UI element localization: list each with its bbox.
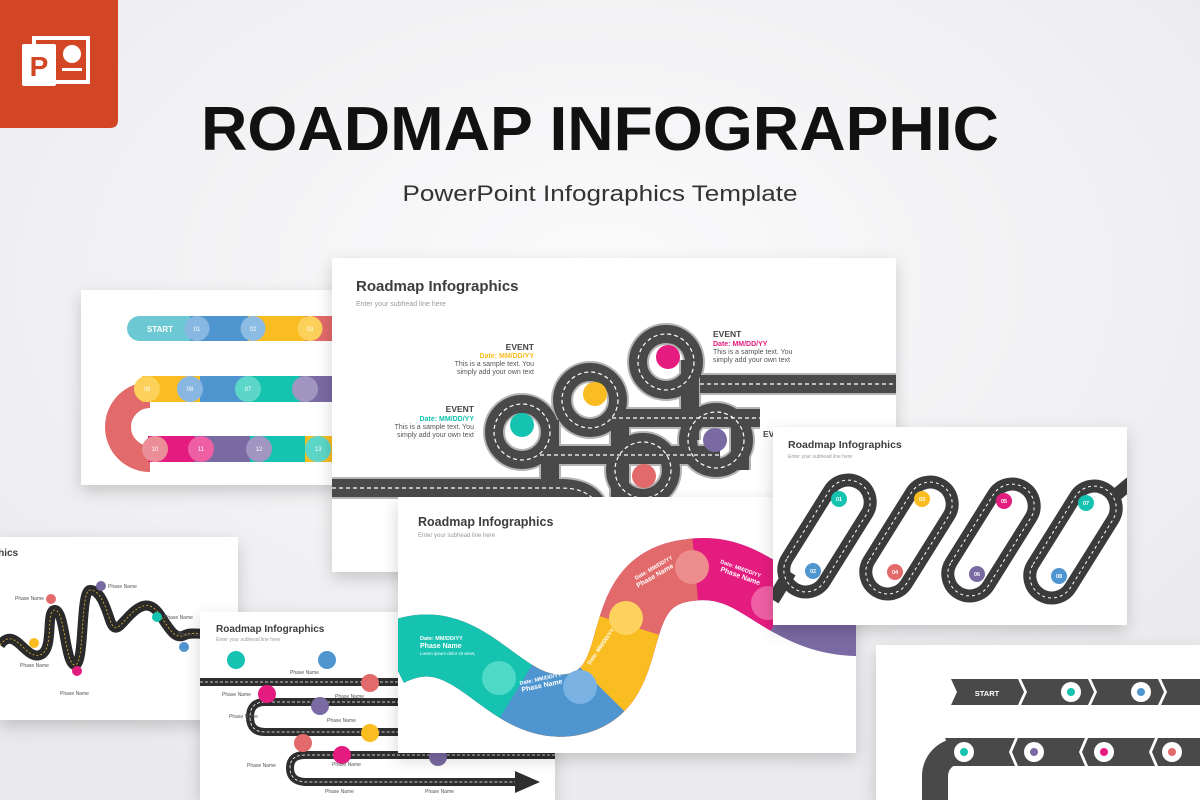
curve and rows: 11 [198, 447, 205, 453]
panel: straight roads with pins (bottom left): Phase Name [290, 670, 319, 676]
panel: straight roads with pins (bottom left): Phase Name [425, 789, 454, 795]
loops [773, 472, 1140, 606]
pins: Phase Name [60, 691, 89, 697]
panel: colored wave roadmap (bottom center) [390, 497, 870, 753]
panel: straight roads with pins (bottom left): Phase Name [335, 694, 364, 700]
numbered markers: 04 [892, 570, 899, 576]
phase texts: Phase Name [420, 643, 462, 650]
panel: straight roads with pins (bottom left): Phase Name [325, 789, 354, 795]
start pill row: 03 [307, 327, 314, 333]
phase texts: Phase Name [636, 563, 675, 590]
curve and rows: 07 [245, 387, 252, 393]
curve and rows [118, 376, 345, 462]
phase texts: Date: MM/DD/YY [719, 559, 762, 580]
panel: straight roads with pins (bottom left): Phase Name [247, 763, 276, 769]
event texts: simply add your own text [713, 357, 790, 364]
curve and rows: 12 [256, 447, 263, 453]
curve and rows: 09 [144, 387, 151, 393]
pins [510, 345, 727, 488]
panel: snake pill roadmap (top left) [81, 290, 345, 485]
event texts: This is a sample text. You [395, 424, 474, 431]
event texts: This is a sample text. You [713, 349, 792, 356]
panel: straight roads with pins (bottom left): Enter your subhead line here [216, 637, 280, 643]
wave bands [390, 569, 870, 706]
start pill row: 02 [250, 327, 257, 333]
numbered markers: 03 [919, 497, 925, 503]
heading: Roadmap Infographics [356, 278, 519, 295]
event texts: EVENT [763, 429, 792, 439]
second row [922, 738, 1200, 800]
panel: straight roads with pins (bottom left): Phase Name [327, 718, 356, 724]
panel: knot roadmap (top center): Enter your subhead line here [356, 301, 446, 308]
pins: Phase Name [15, 596, 44, 602]
phase texts: Lorem ipsum dolor sit amet, [420, 651, 476, 656]
roads [332, 334, 896, 520]
icon: powerpoint logo [0, 0, 118, 128]
panel: straight roads with pins (bottom left) [200, 612, 560, 800]
phase texts: Date: MM/DD/YY [519, 672, 563, 687]
numbered markers: 07 [1083, 501, 1089, 507]
subtitle: PowerPoint Infographics Template [402, 181, 798, 206]
numbered markers: 01 [836, 497, 842, 503]
curve and rows: 13 [315, 447, 322, 453]
pins [227, 651, 447, 766]
event texts: Date: MM/DD/YY [480, 353, 534, 360]
pins [15, 581, 207, 697]
event texts: EVENT [446, 404, 475, 414]
panel: knot roadmap (top center) [332, 258, 896, 572]
numbered markers: 05 [1001, 499, 1007, 505]
start row [951, 679, 1200, 705]
phase texts: Date: MM/DD/YY [634, 555, 674, 582]
pins: Phase Name [178, 632, 207, 638]
panel: diagonal loops roadmap (right): Enter your subhead line here [788, 454, 852, 460]
panel: diagonal loops roadmap (right) [773, 427, 1140, 625]
pins: Phase Name [164, 615, 193, 621]
event texts [395, 329, 792, 439]
event texts: This is a sample text. You [455, 361, 534, 368]
curve and rows: 08 [187, 387, 194, 393]
numbered markers [805, 491, 1094, 584]
icon: powerpoint logo: P [30, 51, 48, 82]
panel: straight roads with pins (bottom left): Roadmap Infographics [216, 624, 325, 635]
numbered markers: 06 [974, 572, 980, 578]
start pill row [127, 316, 345, 341]
road [0, 590, 238, 665]
event texts: EVENT [506, 342, 535, 352]
panel: straight roads with pins (bottom left): Phase Name [222, 692, 251, 698]
numbered markers: 08 [1056, 574, 1062, 580]
event texts: simply add your own text [457, 369, 534, 376]
event texts: simply add your own text [397, 432, 474, 439]
start row: START [975, 689, 1000, 698]
panel: winding road with pins (left) [0, 537, 238, 720]
event texts: Date: MM/DD/YY [420, 416, 474, 423]
panel: straight roads with pins (bottom left): Phase Name [332, 762, 361, 768]
phase texts: Phase Name [719, 566, 761, 587]
panel: colored wave roadmap (bottom center): Roadmap Infographics [418, 515, 553, 529]
pins: Phase Name [108, 584, 137, 590]
event texts: Date: MM/DD/YY [713, 341, 768, 348]
panel: chevron roadmap (bottom right) [876, 645, 1200, 800]
numbered markers: 02 [810, 569, 816, 575]
phase texts: Phase Name [521, 678, 563, 694]
panel: colored wave roadmap (bottom center): Enter your subhead line here [418, 533, 496, 539]
phase texts [420, 555, 762, 694]
icon circles [482, 550, 785, 704]
event texts: EVENT [713, 329, 742, 339]
panel: diagonal loops roadmap (right): Roadmap Infographics [788, 439, 902, 451]
roads [200, 682, 560, 782]
phase texts: Date: MM/DD/YY [420, 636, 463, 642]
title: ROADMAP INFOGRAPHIC [201, 95, 999, 164]
curve and rows: 10 [152, 447, 159, 453]
pins: Phase Name [20, 663, 49, 669]
start pill row: START [147, 325, 173, 334]
phase texts: Date: MM/DD/YY [587, 627, 616, 666]
start pill row: 01 [194, 327, 201, 333]
panel: straight roads with pins (bottom left): Phase Name [229, 714, 258, 720]
arrow [515, 771, 540, 793]
